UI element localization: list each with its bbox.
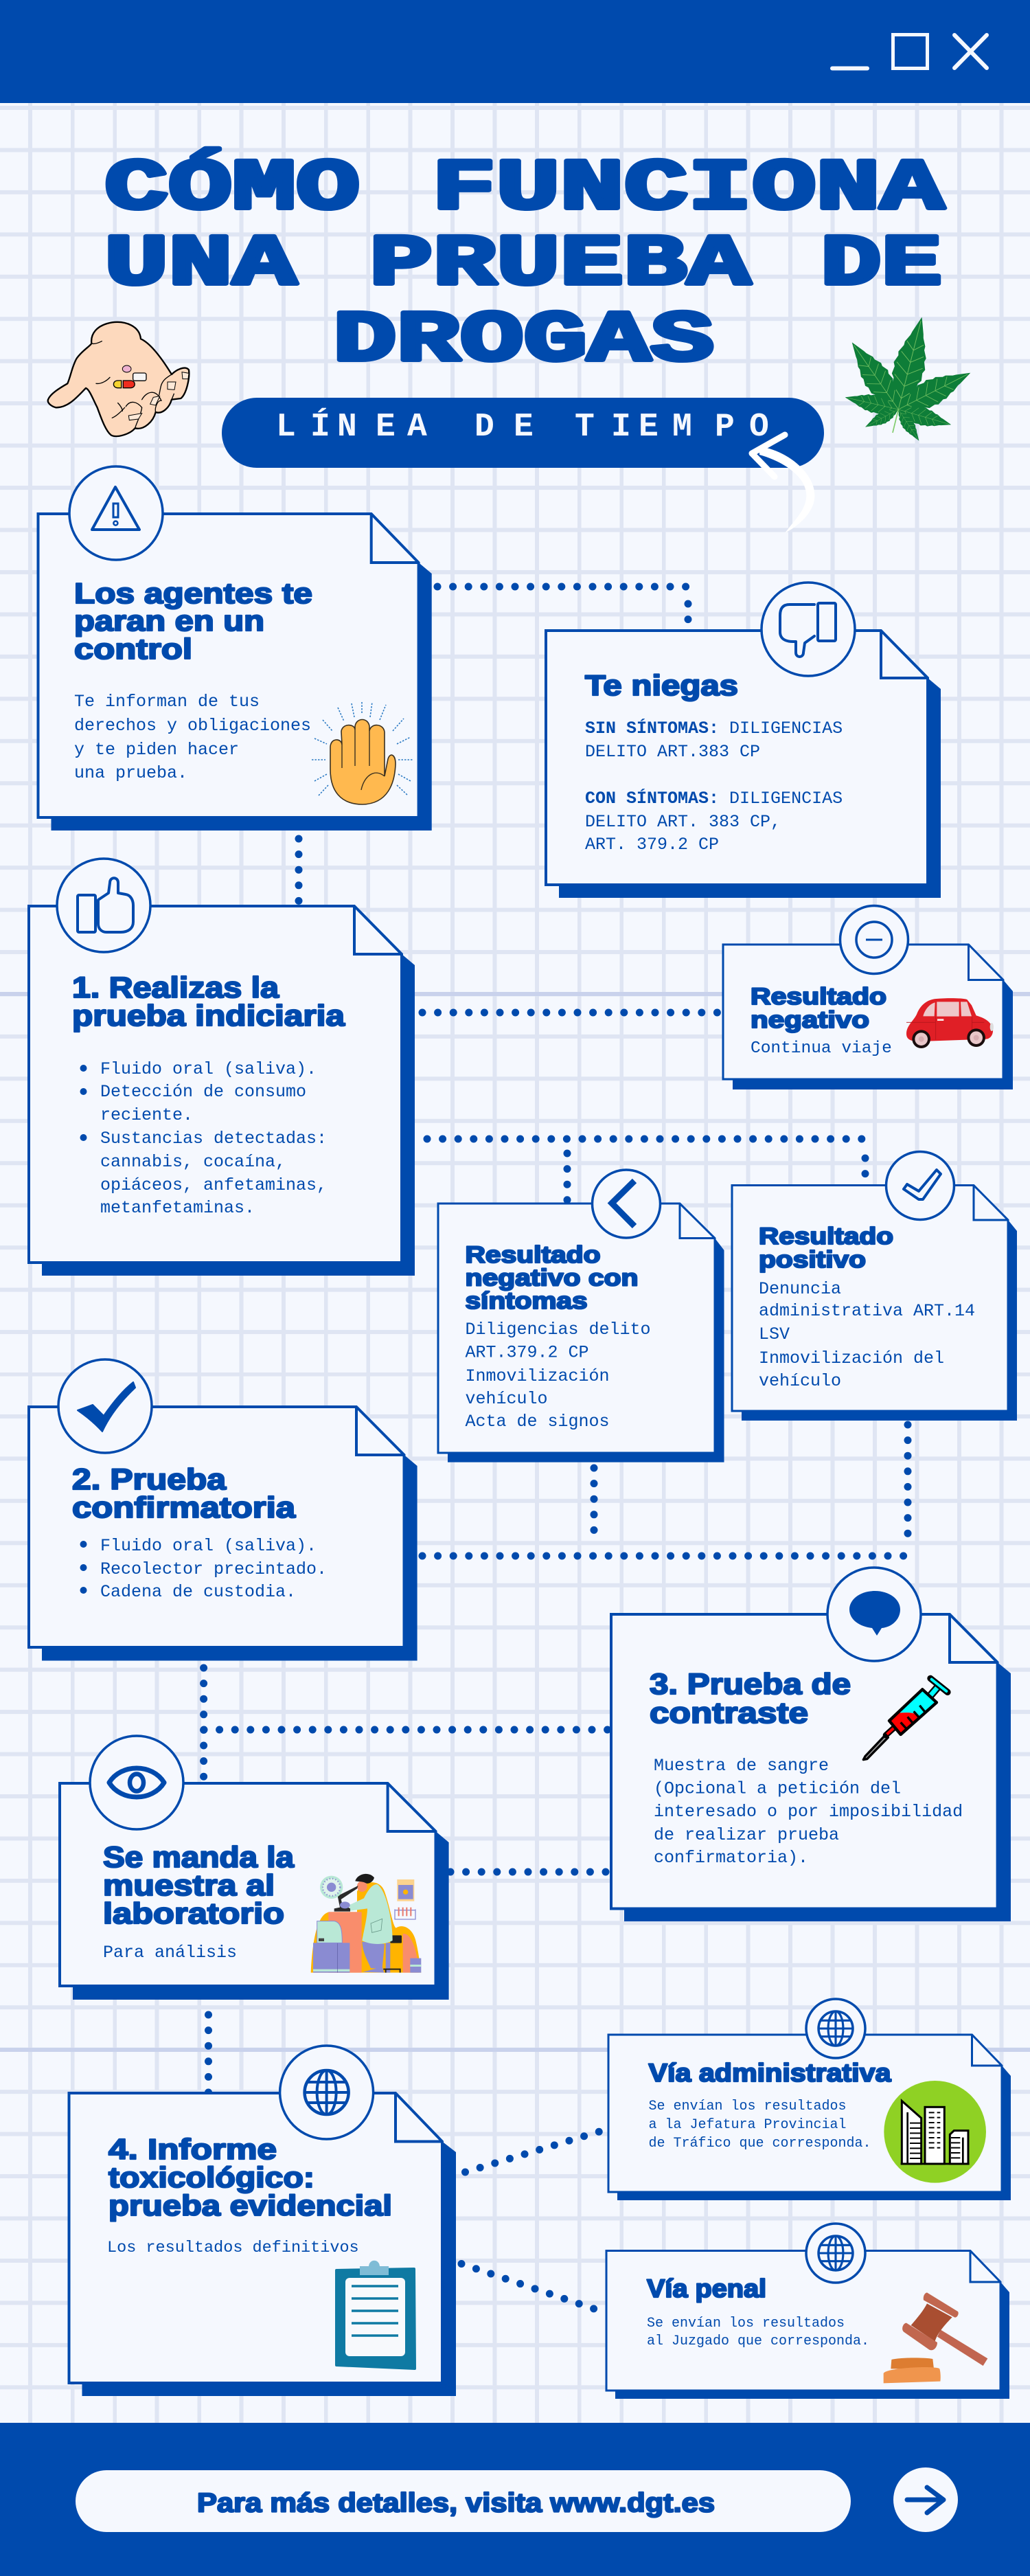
bullet list bbox=[80, 1536, 327, 1602]
icon: small globe bbox=[806, 1999, 865, 2058]
subtitle pill bbox=[222, 398, 824, 468]
heading: Vía administrativa bbox=[648, 2059, 891, 2087]
heading: confirmatoria bbox=[72, 1491, 296, 1524]
text block: vehículo bbox=[759, 1371, 841, 1391]
header bar with window controls bbox=[0, 0, 1030, 103]
heading bbox=[108, 2133, 392, 2222]
text block: confirmatoria). bbox=[654, 1848, 808, 1868]
text block: Se envían los resultados bbox=[647, 2316, 845, 2331]
bullet list: Sustancias detectadas: bbox=[100, 1129, 327, 1149]
text block: de realizar prueba bbox=[654, 1825, 839, 1845]
title: UNA bbox=[104, 224, 297, 306]
text block: Continua viaje bbox=[751, 1039, 892, 1058]
bullet list: cannabis, cocaína, bbox=[100, 1152, 286, 1172]
heading bbox=[72, 971, 345, 1032]
icon: outlined check bbox=[886, 1151, 954, 1220]
text block: administrativa ART.14 bbox=[759, 1301, 975, 1321]
icon: green circle with buildings bbox=[884, 2081, 986, 2183]
text block: y te piden hacer bbox=[74, 740, 239, 760]
connector: dotted lines between steps bbox=[204, 587, 910, 2309]
text block: (Opcional a petición del bbox=[654, 1779, 901, 1798]
heading: laboratorio bbox=[103, 1897, 284, 1930]
text block: Acta de signos bbox=[466, 1412, 610, 1432]
heading bbox=[751, 984, 886, 1033]
bullet list: Fluido oral (saliva). bbox=[100, 1059, 317, 1079]
bullet list: opiáceos, anfetaminas, bbox=[100, 1175, 327, 1195]
heading: Resultado bbox=[759, 1223, 893, 1250]
icon: cannabis leaf bbox=[840, 313, 976, 444]
panel: vía penal bbox=[606, 2224, 1009, 2399]
panel: 2. prueba confirmatoria bbox=[29, 1359, 417, 1661]
text block bbox=[585, 718, 843, 855]
icon: eye bbox=[90, 1736, 183, 1829]
arrow: white curved arrow bbox=[752, 435, 814, 533]
heading: Te niegas bbox=[585, 669, 738, 701]
icon: scientist at microscope bbox=[311, 1874, 421, 1973]
heading bbox=[72, 1463, 296, 1524]
text block: Denuncia bbox=[759, 1279, 841, 1299]
text block: Inmovilización del bbox=[759, 1348, 944, 1368]
text block: Se envían los resultados bbox=[648, 2099, 847, 2114]
title: DROGAS bbox=[333, 300, 714, 382]
bullet list: reciente. bbox=[100, 1105, 193, 1125]
heading: síntomas bbox=[466, 1288, 588, 1314]
text block: Para análisis bbox=[103, 1943, 237, 1963]
heading: toxicológico: bbox=[108, 2161, 314, 2193]
icon: red car bbox=[906, 998, 994, 1048]
text block: una prueba. bbox=[74, 763, 187, 783]
icon: hand with pills bbox=[48, 322, 189, 436]
bullet list: Fluido oral (saliva). bbox=[100, 1536, 317, 1556]
text block: Inmovilización bbox=[466, 1366, 610, 1386]
footer bar bbox=[0, 2423, 1030, 2576]
heading: Los agentes te bbox=[74, 577, 312, 609]
icon: thumbs up bbox=[57, 859, 150, 952]
heading: 1. Realizas la bbox=[72, 971, 279, 1004]
text block: interesado o por imposibilidad bbox=[654, 1802, 963, 1822]
bullet list: Cadena de custodia. bbox=[100, 1582, 296, 1602]
heading: negativo bbox=[751, 1007, 869, 1033]
title bbox=[104, 148, 945, 382]
panel: 3. prueba de contraste bbox=[611, 1568, 1011, 1921]
heading: paran en un bbox=[74, 605, 264, 637]
text block bbox=[466, 1320, 651, 1432]
heading: contraste bbox=[650, 1697, 808, 1730]
text block bbox=[648, 2099, 871, 2151]
panel: 4. informe toxicológico bbox=[69, 2046, 456, 2396]
text block bbox=[74, 692, 311, 783]
icon: globe bbox=[280, 2046, 374, 2139]
icon: raised hand bbox=[312, 702, 413, 804]
heading: Resultado bbox=[751, 984, 886, 1010]
icon: arrow button bbox=[893, 2467, 958, 2532]
bullet list bbox=[80, 1059, 327, 1218]
text block: DELITO ART. 383 CP, bbox=[585, 812, 781, 832]
text block: de Tráfico que corresponda. bbox=[648, 2136, 871, 2151]
text block: SIN SÍNTOMAS: DILIGENCIAS bbox=[585, 718, 843, 738]
icon: speech bubble bbox=[827, 1568, 921, 1661]
title: DE bbox=[821, 224, 942, 306]
panel: 1. realizas la prueba indiciaria bbox=[29, 859, 415, 1276]
heading: Resultado bbox=[466, 1242, 600, 1268]
heading: control bbox=[74, 633, 192, 665]
text block bbox=[654, 1756, 963, 1868]
icon: warning triangle bbox=[69, 466, 163, 560]
heading: 3. Prueba de bbox=[650, 1668, 851, 1701]
heading: prueba indiciaria bbox=[72, 999, 345, 1032]
text block: Los resultados definitivos bbox=[107, 2239, 359, 2257]
text block: vehículo bbox=[466, 1389, 548, 1409]
bullet list: Recolector precintado. bbox=[100, 1559, 327, 1579]
text block: derechos y obligaciones bbox=[74, 716, 311, 736]
text block: a la Jefatura Provincial bbox=[648, 2117, 847, 2133]
panel: resultado positivo bbox=[732, 1151, 1017, 1421]
heading bbox=[74, 577, 312, 665]
icon: thumbs down bbox=[762, 583, 855, 676]
text block: LSV bbox=[759, 1324, 790, 1344]
panel: los agentes te paran en un control bbox=[38, 466, 432, 831]
text block: CON SÍNTOMAS: DILIGENCIAS bbox=[585, 788, 843, 809]
text block: ART. 379.2 CP bbox=[585, 835, 719, 855]
text block: DELITO ART.383 CP bbox=[585, 742, 760, 762]
heading bbox=[466, 1242, 639, 1314]
heading: Se manda la bbox=[103, 1841, 295, 1874]
text block: Te informan de tus bbox=[74, 692, 260, 712]
bullet list: Detección de consumo bbox=[100, 1082, 306, 1102]
text block: ART.379.2 CP bbox=[466, 1342, 589, 1363]
text block: Muestra de sangre bbox=[654, 1756, 829, 1776]
heading bbox=[103, 1841, 295, 1930]
footer pill with link text: Para más detalles, visita www.dgt.es bbox=[197, 2488, 715, 2518]
title: PRUEBA bbox=[369, 224, 751, 306]
icon: gavel bbox=[884, 2292, 987, 2383]
panel: se manda la muestra al laboratorio bbox=[60, 1736, 449, 2000]
icon: syringe bbox=[863, 1678, 948, 1760]
heading bbox=[759, 1223, 893, 1273]
bullet list: metanfetaminas. bbox=[100, 1198, 255, 1218]
heading bbox=[650, 1668, 851, 1730]
panel: resultado negativo bbox=[723, 905, 1013, 1089]
text block: al Juzgado que corresponda. bbox=[647, 2334, 869, 2349]
icon: solid check bbox=[58, 1359, 152, 1453]
heading: 2. Prueba bbox=[72, 1463, 227, 1496]
text block bbox=[759, 1279, 975, 1391]
icon: small globe bbox=[806, 2224, 865, 2283]
icon: clipboard bbox=[336, 2261, 415, 2369]
heading: Vía penal bbox=[647, 2274, 766, 2303]
subtitle pill: LÍNEA DE TIEMPO bbox=[276, 408, 769, 446]
text block: Diligencias delito bbox=[466, 1320, 651, 1340]
heading: prueba evidencial bbox=[108, 2189, 392, 2222]
icon: chevron left bbox=[592, 1170, 661, 1238]
text block bbox=[647, 2316, 869, 2349]
heading: positivo bbox=[759, 1247, 866, 1273]
heading: muestra al bbox=[103, 1869, 275, 1902]
heading: 4. Informe bbox=[108, 2133, 277, 2165]
heading: negativo con bbox=[466, 1265, 639, 1291]
panel: te niegas bbox=[546, 583, 941, 898]
icon: minus bbox=[840, 905, 908, 974]
title: FUNCIONA bbox=[432, 148, 945, 230]
panel: resultado negativo con síntomas bbox=[438, 1170, 724, 1462]
panel: vía administrativa bbox=[608, 1999, 1011, 2200]
title: CÓMO bbox=[104, 148, 360, 230]
footer pill with link text bbox=[76, 2470, 851, 2532]
